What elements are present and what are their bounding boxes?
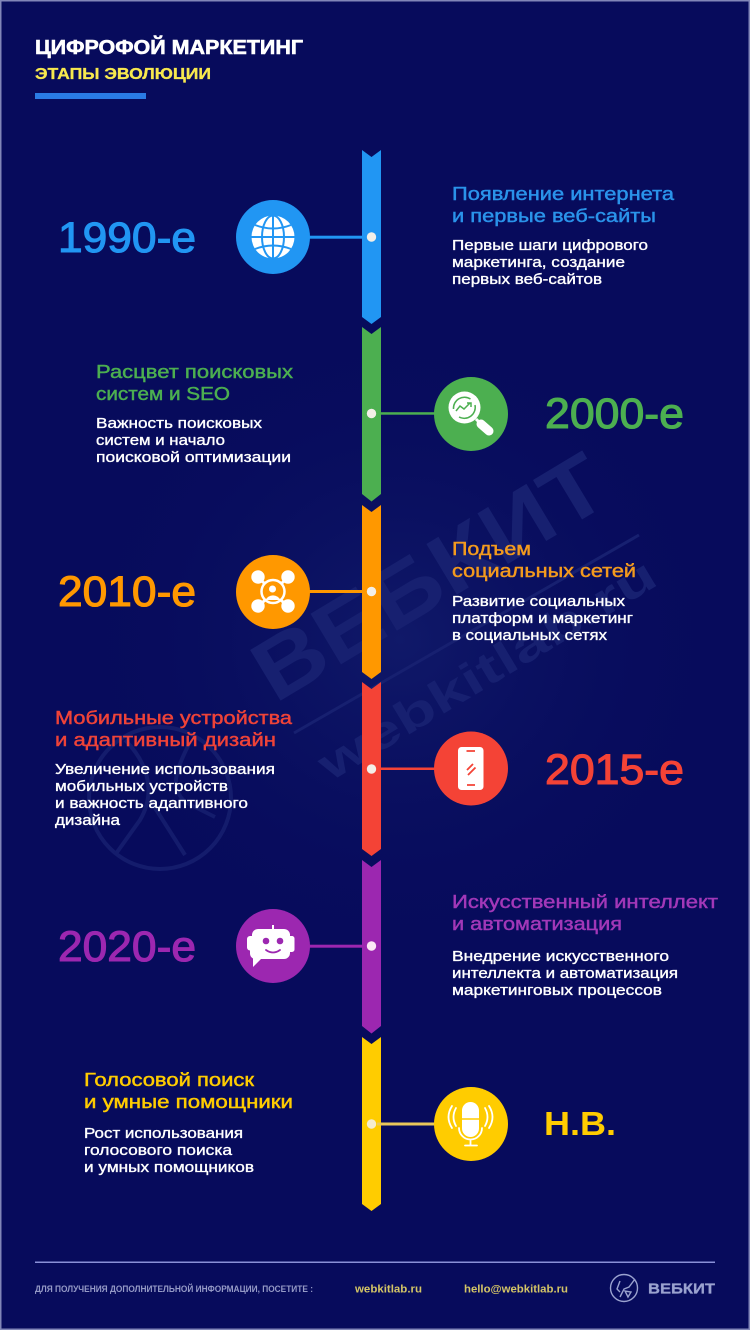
- website: webkitlab.ru: [354, 1284, 422, 1296]
- heading: Подъем: [452, 538, 531, 559]
- year: 2020-е: [58, 923, 196, 971]
- heading: [452, 183, 675, 226]
- description: Рост использования: [84, 1126, 243, 1142]
- logo: [610, 1274, 715, 1302]
- description: Важность поисковых: [96, 416, 263, 432]
- connector: [367, 764, 437, 774]
- year: 2015-е: [545, 746, 684, 794]
- panel: 1990s: [58, 183, 675, 288]
- icon: social network: [236, 555, 310, 629]
- description: маркетинга, создание: [452, 255, 625, 271]
- icon: smartphone: [434, 732, 508, 806]
- segment: 2020s: [362, 860, 381, 1034]
- main heading: ЦИФРОФОЙ МАРКЕТИНГ: [35, 35, 303, 59]
- description: Увеличение использования: [55, 762, 275, 778]
- heading: систем и SEO: [96, 383, 230, 404]
- timeline axis: [362, 150, 381, 1211]
- heading: и автоматизация: [452, 913, 622, 934]
- panel: 2020s: [58, 891, 719, 999]
- logo: ВЕБКИТ: [648, 1280, 715, 1298]
- description: Внедрение искусственного: [452, 949, 669, 965]
- heading: и умные помощники: [84, 1091, 293, 1112]
- description: систем и начало: [96, 433, 225, 449]
- heading: [96, 361, 294, 404]
- heading: Голосовой поиск: [84, 1069, 255, 1090]
- segment: 2015: [362, 682, 381, 856]
- connector: [306, 587, 376, 596]
- description: маркетинговых процессов: [452, 983, 662, 999]
- watermark: webkitlab.ru: [307, 548, 665, 791]
- segment: 2010s: [362, 505, 381, 679]
- description: [452, 594, 633, 644]
- description: платформ и маркетинг: [452, 611, 633, 627]
- description: поисковой оптимизации: [96, 450, 291, 466]
- year: 2010-е: [58, 568, 196, 616]
- connector: [306, 941, 376, 951]
- description: первых веб-сайтов: [452, 272, 602, 288]
- description: Первые шаги цифрового: [452, 238, 648, 254]
- panel: 2000s: [96, 361, 684, 466]
- description: [55, 762, 275, 829]
- heading: Искусственный интеллект: [452, 891, 719, 912]
- description: мобильных устройств: [55, 779, 228, 795]
- description: интеллекта и автоматизация: [452, 966, 678, 982]
- year: 2000-е: [545, 390, 684, 438]
- description: [96, 416, 291, 466]
- heading: и адаптивный дизайн: [55, 729, 276, 750]
- panel: voice assistants: [84, 1069, 616, 1176]
- icon: microphone: [434, 1087, 508, 1161]
- segment: 2000s: [362, 327, 381, 502]
- icon: magnifier: [434, 377, 508, 451]
- description: дизайна: [55, 813, 121, 829]
- description: [452, 949, 678, 999]
- accent bar: [35, 93, 146, 99]
- year: 1990-е: [58, 214, 196, 262]
- description: голосового поиска: [84, 1143, 233, 1159]
- heading: [452, 538, 636, 581]
- watermark: ВЕБКИТ: [235, 435, 623, 720]
- heading: Появление интернета: [452, 183, 675, 204]
- year: Н.В.: [544, 1105, 616, 1142]
- description: и важность адаптивного: [55, 796, 248, 812]
- heading: Расцвет поисковых: [96, 361, 294, 382]
- connector: [306, 232, 376, 242]
- heading: [84, 1069, 293, 1112]
- segment: voice: [362, 1037, 381, 1211]
- panel: 2010s: [58, 538, 636, 644]
- email: hello@webkitlab.ru: [464, 1284, 568, 1296]
- subheading: ЭТАПЫ ЭВОЛЮЦИИ: [35, 66, 211, 83]
- watermark: [89, 435, 665, 869]
- icon: chatbot: [236, 909, 310, 983]
- heading: социальных сетей: [452, 560, 636, 581]
- panel: 2015: [55, 707, 684, 829]
- heading: [55, 707, 293, 750]
- icon: globe: [236, 200, 310, 274]
- description: [452, 238, 648, 288]
- description: в социальных сетях: [452, 628, 608, 644]
- footer: [35, 1262, 715, 1302]
- segment: 1990s: [362, 150, 381, 324]
- title: [35, 35, 303, 99]
- connector: [367, 409, 437, 418]
- description: и умных помощников: [84, 1160, 254, 1176]
- footer note: ДЛЯ ПОЛУЧЕНИЯ ДОПОЛНИТЕЛЬНОЙ ИНФОРМАЦИИ, ПОСЕТИТЕ :: [35, 1283, 313, 1295]
- heading: Мобильные устройства: [55, 707, 293, 728]
- heading: и первые веб-сайты: [452, 205, 656, 226]
- heading: [452, 891, 719, 934]
- connector: [367, 1119, 437, 1129]
- description: [84, 1126, 254, 1176]
- description: Развитие социальных: [452, 594, 626, 610]
